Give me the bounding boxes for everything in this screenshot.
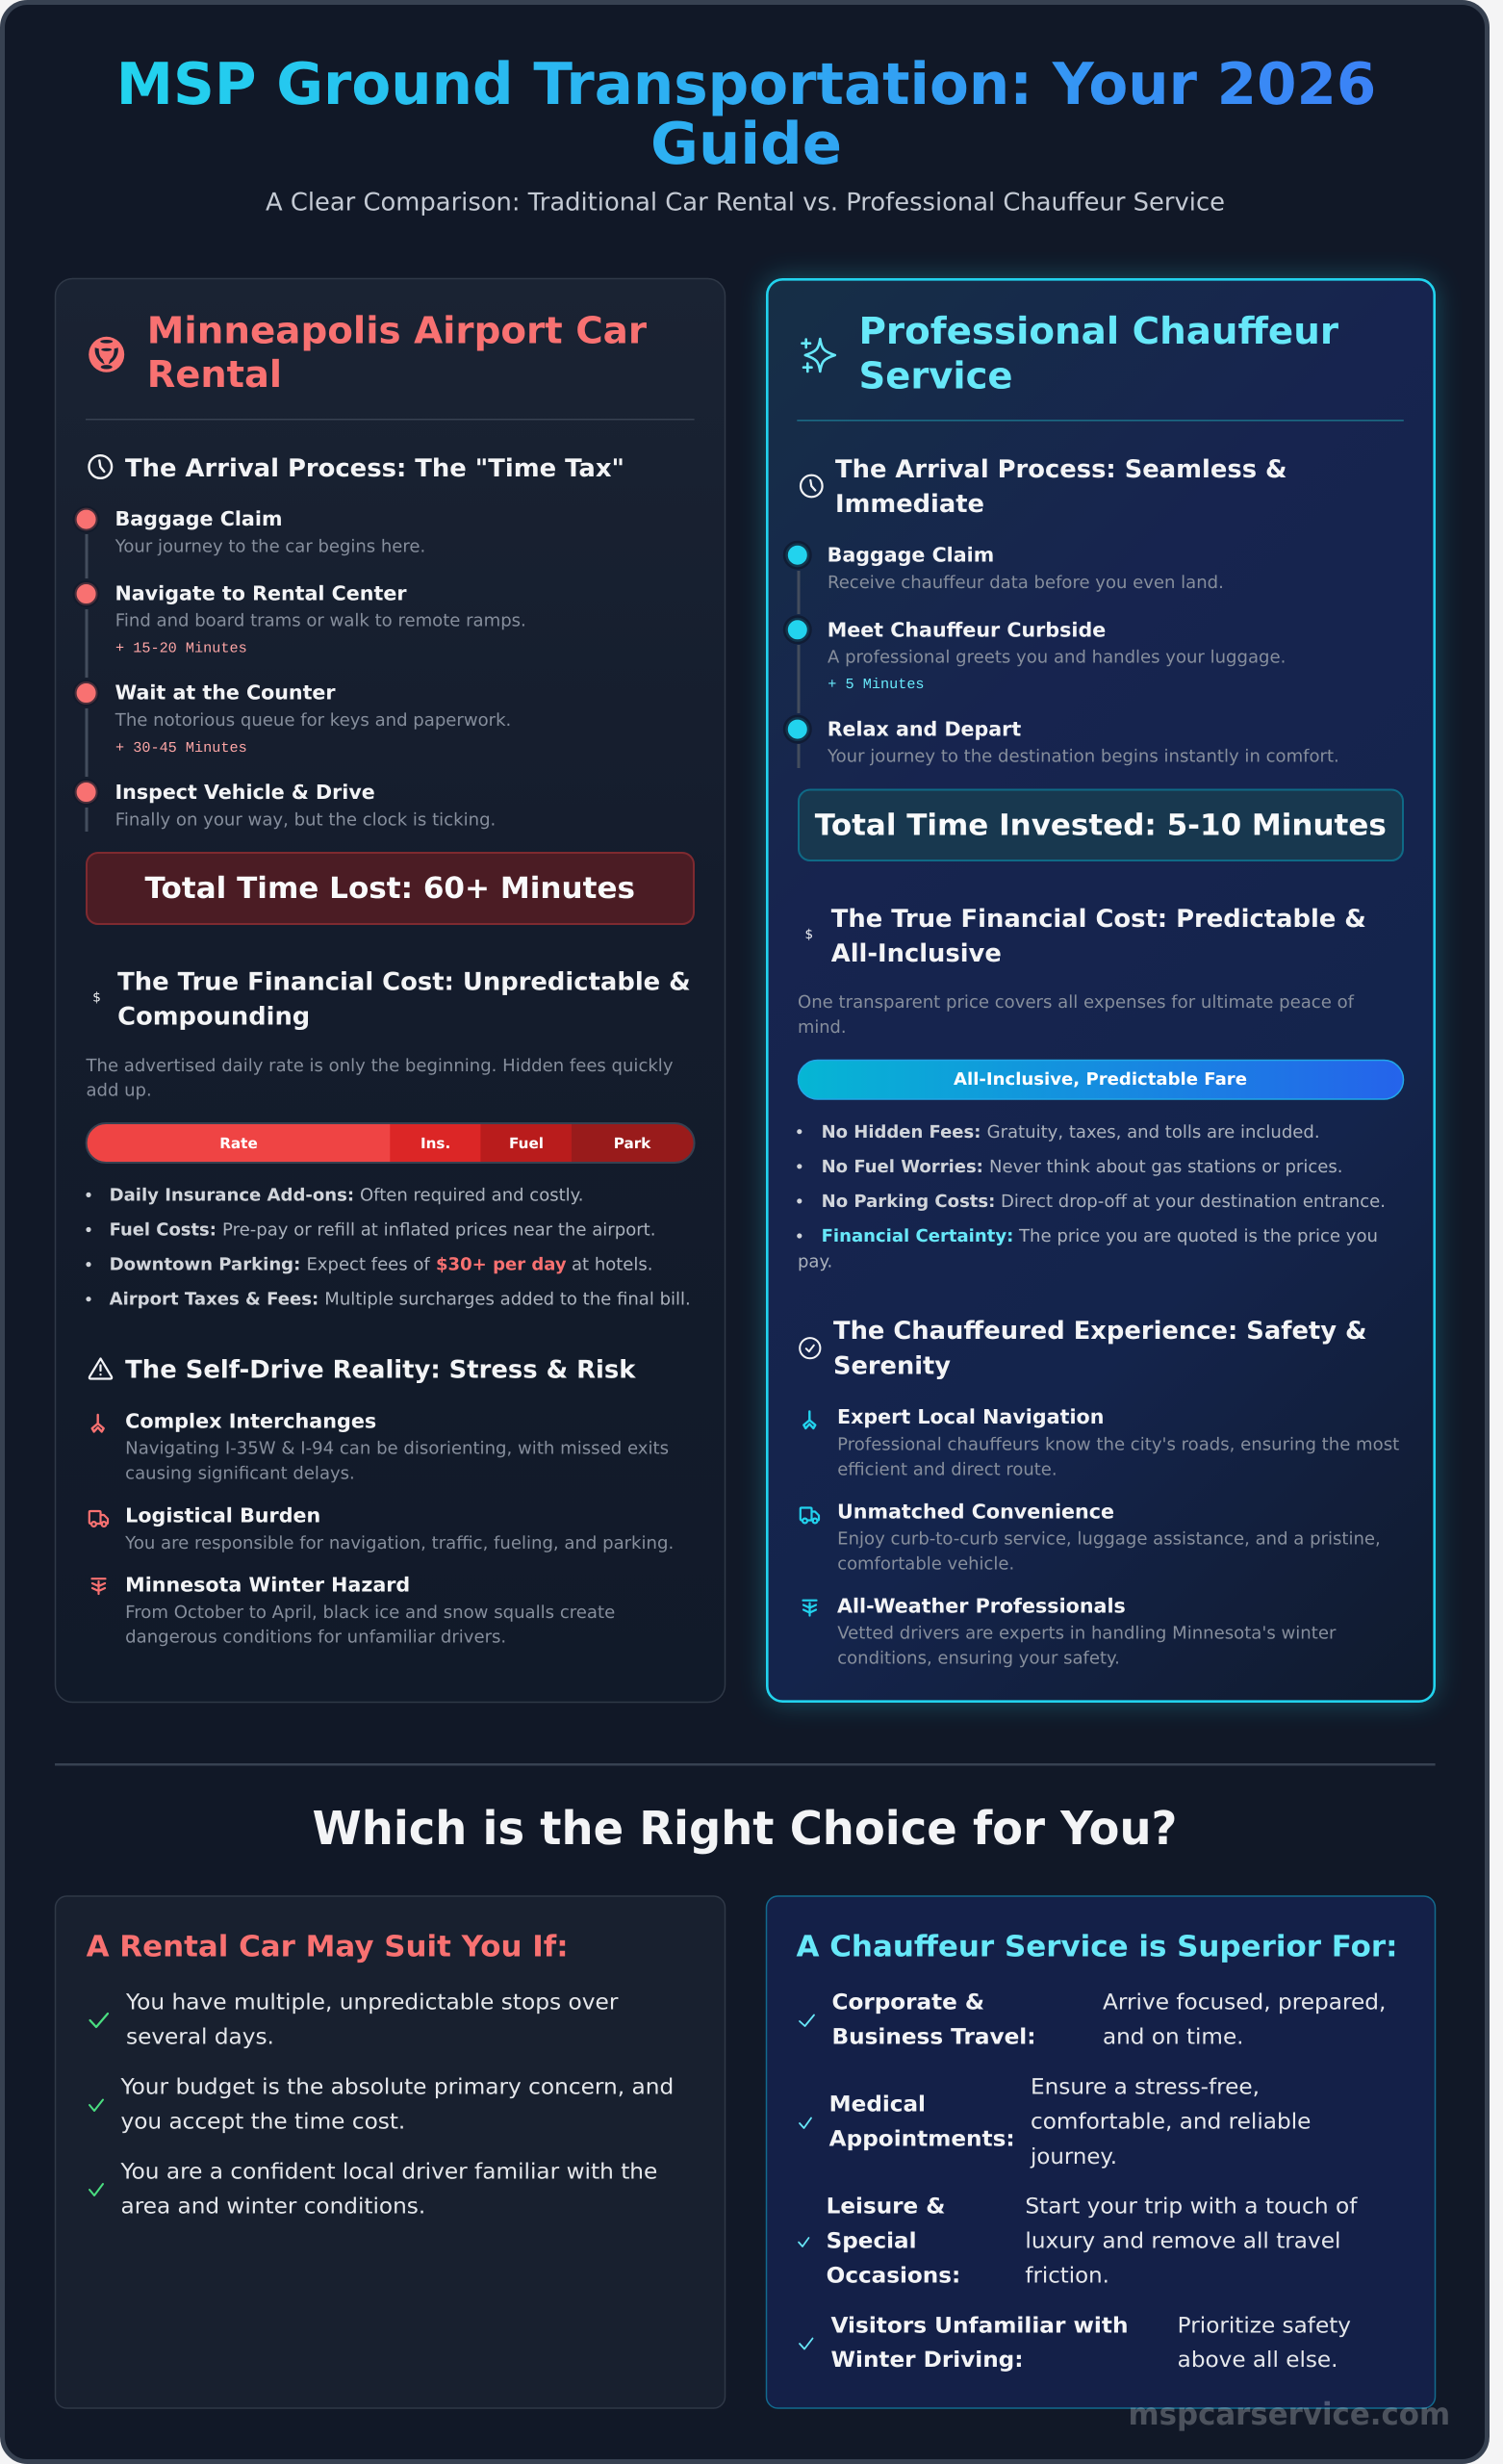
step: baggage claim: Baggage Claim: [828, 544, 994, 567]
icon: circle check: [800, 1338, 820, 1358]
item: corporate travel: [800, 1990, 1386, 2049]
icon: clock: [801, 475, 823, 497]
step: baggage claim: Receive chauffeur data before you even land.: [828, 573, 1224, 593]
timeline: [75, 507, 526, 832]
item: winter hazard: dangerous conditions for unfamiliar drivers.: [125, 1628, 506, 1648]
description: mind.: [798, 1017, 847, 1038]
step: relax and depart: Relax and Depart: [828, 718, 1021, 741]
icon: road fork: [92, 1415, 104, 1432]
icon: check: [89, 2100, 103, 2111]
panel: car rental: [56, 279, 726, 1702]
item: medical appointments: [800, 2075, 1311, 2169]
heading: right choice: Which is the Right Choice for You?: [312, 1802, 1178, 1856]
step: relax and depart: Your journey to the destination begins instantly in comfort.: [827, 747, 1339, 766]
icon: check: [800, 2339, 812, 2348]
item: medical appointments: Ensure a stress-free,: [1031, 2075, 1260, 2100]
section: financial cost: [797, 905, 1403, 1271]
item: unmatched convenience: Enjoy curb-to-curb service, luggage assistance, and a pristine,: [837, 1529, 1381, 1550]
fee list: Pre-pay or refill at inflated prices near the airport.: [222, 1220, 656, 1241]
section: chauffeured experience: [800, 1317, 1399, 1669]
step: navigate to rental center: Navigate to Rental Center: [115, 581, 407, 604]
step: wait at the counter: Wait at the Counter: [115, 681, 336, 705]
step: wait at the counter: + 30-45 Minutes: [115, 739, 247, 757]
panel heading: Minneapolis Airport Car: [147, 309, 647, 352]
item: complex interchanges: causing significant delays.: [125, 1463, 355, 1483]
item: budget: you accept the time cost.: [121, 2110, 405, 2135]
watermark: mspcarservice.com: [1128, 2396, 1450, 2432]
icon: truck: [801, 1507, 819, 1523]
section heading: The True Financial Cost: Unpredictable &: [117, 967, 691, 996]
item: all-weather professionals: [802, 1594, 1337, 1669]
title: MSP Ground Transportation: Your 2026: [116, 51, 1376, 118]
item: corporate travel: Arrive focused, prepared,: [1103, 1990, 1386, 2015]
icon: warning triangle: [89, 1359, 112, 1378]
item: winter visitors: Prioritize safety: [1178, 2313, 1351, 2338]
panel heading: [147, 309, 647, 397]
item: leisure occasions: Start your trip with a touch of: [1025, 2194, 1359, 2219]
item: winter hazard: [92, 1574, 615, 1648]
item: expert local navigation: Professional chauffeurs know the city's roads, ensuring the most: [837, 1434, 1399, 1454]
item: corporate travel: Corporate &: [831, 1990, 984, 2015]
step: baggage claim: [828, 544, 1224, 593]
fee list: Airport Taxes & Fees:: [110, 1290, 318, 1310]
fee list: [86, 1186, 691, 1310]
item: leisure occasions: Occasions:: [827, 2264, 960, 2289]
fee list: at hotels.: [572, 1255, 652, 1275]
item: leisure occasions: Special: [827, 2229, 916, 2254]
step: navigate to rental center: Find and board trams or walk to remote ramps.: [115, 611, 526, 631]
step: inspect vehicle and drive: [115, 781, 496, 830]
description: One transparent price covers all expenses for ultimate peace of: [798, 992, 1355, 1013]
section: financial cost: [85, 967, 695, 1310]
callout: total time invested: Total Time Invested: 5-10 Minutes: [815, 808, 1387, 843]
stacked cost bar: [87, 1123, 695, 1163]
fee list: Downtown Parking:: [110, 1255, 300, 1275]
step: baggage claim: Baggage Claim: [115, 507, 283, 530]
step: meet chauffeur curbside: A professional greets you and handles your luggage.: [828, 648, 1286, 668]
item: budget: [89, 2075, 674, 2135]
benefit list: No Hidden Fees:: [822, 1122, 981, 1142]
section heading: The Arrival Process: Seamless &: [835, 455, 1287, 484]
fare bar: All-Inclusive, Predictable Fare: [954, 1070, 1247, 1090]
fee list: Expect fees of: [306, 1255, 430, 1275]
item: confident driver: You are a confident local driver familiar with the: [119, 2159, 657, 2184]
icon: check: [90, 2014, 108, 2027]
item: unmatched convenience: comfortable vehicle.: [837, 1553, 1014, 1574]
fee list: Often required and costly.: [360, 1186, 583, 1205]
benefit list: Direct drop-off at your destination entrance.: [1001, 1192, 1386, 1212]
item: winter hazard: From October to April, black ice and snow squalls create: [125, 1603, 615, 1623]
item: winter visitors: [800, 2313, 1351, 2373]
item: leisure occasions: luxury and remove all travel: [1025, 2229, 1340, 2254]
section: arrival process: [785, 455, 1403, 860]
item: multiple stops: You have multiple, unpredictable stops over: [125, 1990, 619, 2015]
panel heading: A Chauffeur Service is Superior For:: [797, 1930, 1397, 1964]
step: baggage claim: Your journey to the car begins here.: [115, 537, 425, 556]
item: leisure occasions: Leisure &: [827, 2194, 945, 2219]
icon: check: [89, 2184, 103, 2195]
icon: rental car badge: [89, 337, 124, 372]
item: medical appointments: comfortable, and reliable: [1031, 2110, 1311, 2135]
step: wait at the counter: The notorious queue for keys and paperwork.: [115, 710, 511, 731]
step: relax and depart: [827, 718, 1339, 766]
stacked cost bar: Park: [614, 1135, 651, 1152]
section heading: [835, 455, 1287, 519]
section heading: The True Financial Cost: Predictable &: [831, 905, 1366, 934]
fee list: $30+ per day: [436, 1255, 567, 1275]
item: complex interchanges: Complex Interchanges: [125, 1409, 376, 1432]
item: winter hazard: Minnesota Winter Hazard: [125, 1574, 410, 1597]
section heading: The Chauffeured Experience: Safety &: [833, 1317, 1366, 1346]
description: The advertised daily rate is only the beginning. Hidden fees quickly: [85, 1056, 674, 1076]
item: winter visitors: above all else.: [1178, 2348, 1337, 2373]
benefit list: [797, 1122, 1386, 1271]
fee list: Daily Insurance Add-ons:: [110, 1186, 354, 1205]
stacked cost bar: Ins.: [420, 1135, 450, 1152]
item: expert local navigation: efficient and direct route.: [837, 1459, 1057, 1479]
item: corporate travel: Business Travel:: [831, 2024, 1035, 2049]
icon: check: [800, 2118, 811, 2128]
item: confident driver: area and winter conditions.: [121, 2194, 425, 2220]
item: leisure occasions: friction.: [1025, 2264, 1109, 2289]
panel: rental car suitability: [56, 1896, 726, 2408]
item: confident driver: [89, 2159, 657, 2220]
benefit list: No Fuel Worries:: [822, 1157, 983, 1177]
item: complex interchanges: [92, 1409, 669, 1483]
step: inspect vehicle and drive: Finally on your way, but the clock is ticking.: [115, 809, 496, 830]
step: meet chauffeur curbside: [828, 618, 1286, 693]
item: expert local navigation: [803, 1405, 1399, 1479]
item: leisure occasions: [799, 2194, 1359, 2289]
icon: dollar: $: [92, 989, 101, 1005]
section: arrival process: [75, 454, 694, 924]
panel heading: [858, 310, 1338, 398]
section heading: Compounding: [117, 1003, 310, 1032]
benefit list: pay.: [798, 1251, 832, 1271]
item: expert local navigation: Expert Local Navigation: [837, 1405, 1104, 1428]
item: logistical burden: You are responsible for navigation, traffic, fueling, and parking.: [124, 1533, 674, 1553]
item: budget: Your budget is the absolute primary concern, and: [119, 2075, 674, 2100]
icon: check: [799, 2238, 808, 2246]
icon: road fork: [803, 1411, 815, 1428]
description: add up.: [87, 1081, 152, 1101]
description: [85, 1056, 674, 1101]
benefit list: The price you are quoted is the price you: [1018, 1226, 1378, 1246]
title: [116, 51, 1376, 178]
callout: total time lost: Total Time Lost: 60+ Minutes: [144, 872, 635, 906]
panel: chauffeur suitability: [766, 1896, 1436, 2408]
panel heading: Professional Chauffeur: [858, 310, 1338, 353]
stacked cost bar: Fuel: [509, 1135, 544, 1152]
item: winter visitors: Winter Driving:: [831, 2348, 1024, 2373]
item: logistical burden: Logistical Burden: [125, 1503, 320, 1527]
section heading: The Arrival Process: The "Time Tax": [125, 454, 624, 483]
section heading: The Self-Drive Reality: Stress & Risk: [125, 1356, 636, 1385]
section heading: [117, 967, 691, 1032]
fee list: Multiple surcharges added to the final bill.: [324, 1290, 691, 1310]
section heading: All-Inclusive: [831, 939, 1002, 968]
item: medical appointments: journey.: [1030, 2144, 1117, 2169]
item: multiple stops: [90, 1990, 619, 2049]
item: logistical burden: [89, 1503, 674, 1553]
item: unmatched convenience: Unmatched Convenience: [837, 1500, 1114, 1523]
section heading: Immediate: [835, 490, 984, 519]
panel: chauffeur service: [767, 279, 1435, 1702]
item: medical appointments: Medical: [829, 2092, 926, 2118]
panel heading: Service: [858, 354, 1012, 398]
title: Guide: [650, 111, 842, 178]
icon: snow layers: [92, 1578, 106, 1594]
item: multiple stops: several days.: [126, 2024, 274, 2049]
step: baggage claim: [115, 507, 425, 556]
icon: check: [800, 2015, 814, 2026]
item: corporate travel: and on time.: [1103, 2024, 1243, 2049]
benefit list: No Parking Costs:: [822, 1192, 995, 1212]
section heading: [833, 1317, 1366, 1380]
step: navigate to rental center: + 15-20 Minutes: [115, 639, 247, 656]
fare bar: [799, 1061, 1403, 1099]
item: all-weather professionals: conditions, ensuring your safety.: [837, 1649, 1120, 1669]
step: wait at the counter: [115, 681, 511, 757]
description: [798, 992, 1355, 1038]
section heading: [831, 905, 1366, 968]
icon: clock: [89, 455, 112, 478]
section: self-drive reality: [89, 1356, 674, 1648]
benefit list: Never think about gas stations or prices.: [989, 1157, 1343, 1177]
item: all-weather professionals: All-Weather Professionals: [837, 1594, 1126, 1617]
fee list: Fuel Costs:: [110, 1220, 217, 1241]
item: unmatched convenience: [801, 1500, 1381, 1574]
step: navigate to rental center: [115, 581, 526, 656]
step: inspect vehicle and drive: Inspect Vehicle & Drive: [115, 781, 375, 804]
timeline: [785, 543, 1339, 768]
section heading: Serenity: [833, 1351, 951, 1380]
icon: dollar: $: [805, 927, 813, 942]
header: [116, 51, 1376, 217]
stacked cost bar: Rate: [219, 1135, 258, 1152]
item: medical appointments: Appointments:: [829, 2127, 1015, 2152]
icon: sparkles: [802, 339, 835, 372]
icon: truck: [89, 1511, 108, 1527]
item: complex interchanges: Navigating I-35W & I-94 can be disorienting, with missed exits: [125, 1439, 669, 1459]
icon: snow layers: [802, 1601, 816, 1615]
panel heading: Rental: [147, 353, 282, 397]
item: winter visitors: Visitors Unfamiliar with: [831, 2313, 1128, 2338]
callout: total time lost: [87, 853, 694, 924]
subtitle: A Clear Comparison: Traditional Car Rental vs. Professional Chauffeur Service: [266, 188, 1225, 217]
step: meet chauffeur curbside: Meet Chauffeur Curbside: [828, 618, 1106, 641]
benefit list: Financial Certainty:: [822, 1226, 1013, 1246]
callout: total time invested: [799, 789, 1403, 860]
step: meet chauffeur curbside: + 5 Minutes: [828, 676, 925, 693]
benefit list: Gratuity, taxes, and tolls are included.: [987, 1122, 1320, 1142]
panel heading: A Rental Car May Suit You If:: [87, 1930, 569, 1964]
item: all-weather professionals: Vetted drivers are experts in handling Minnesota's winter: [837, 1624, 1337, 1644]
